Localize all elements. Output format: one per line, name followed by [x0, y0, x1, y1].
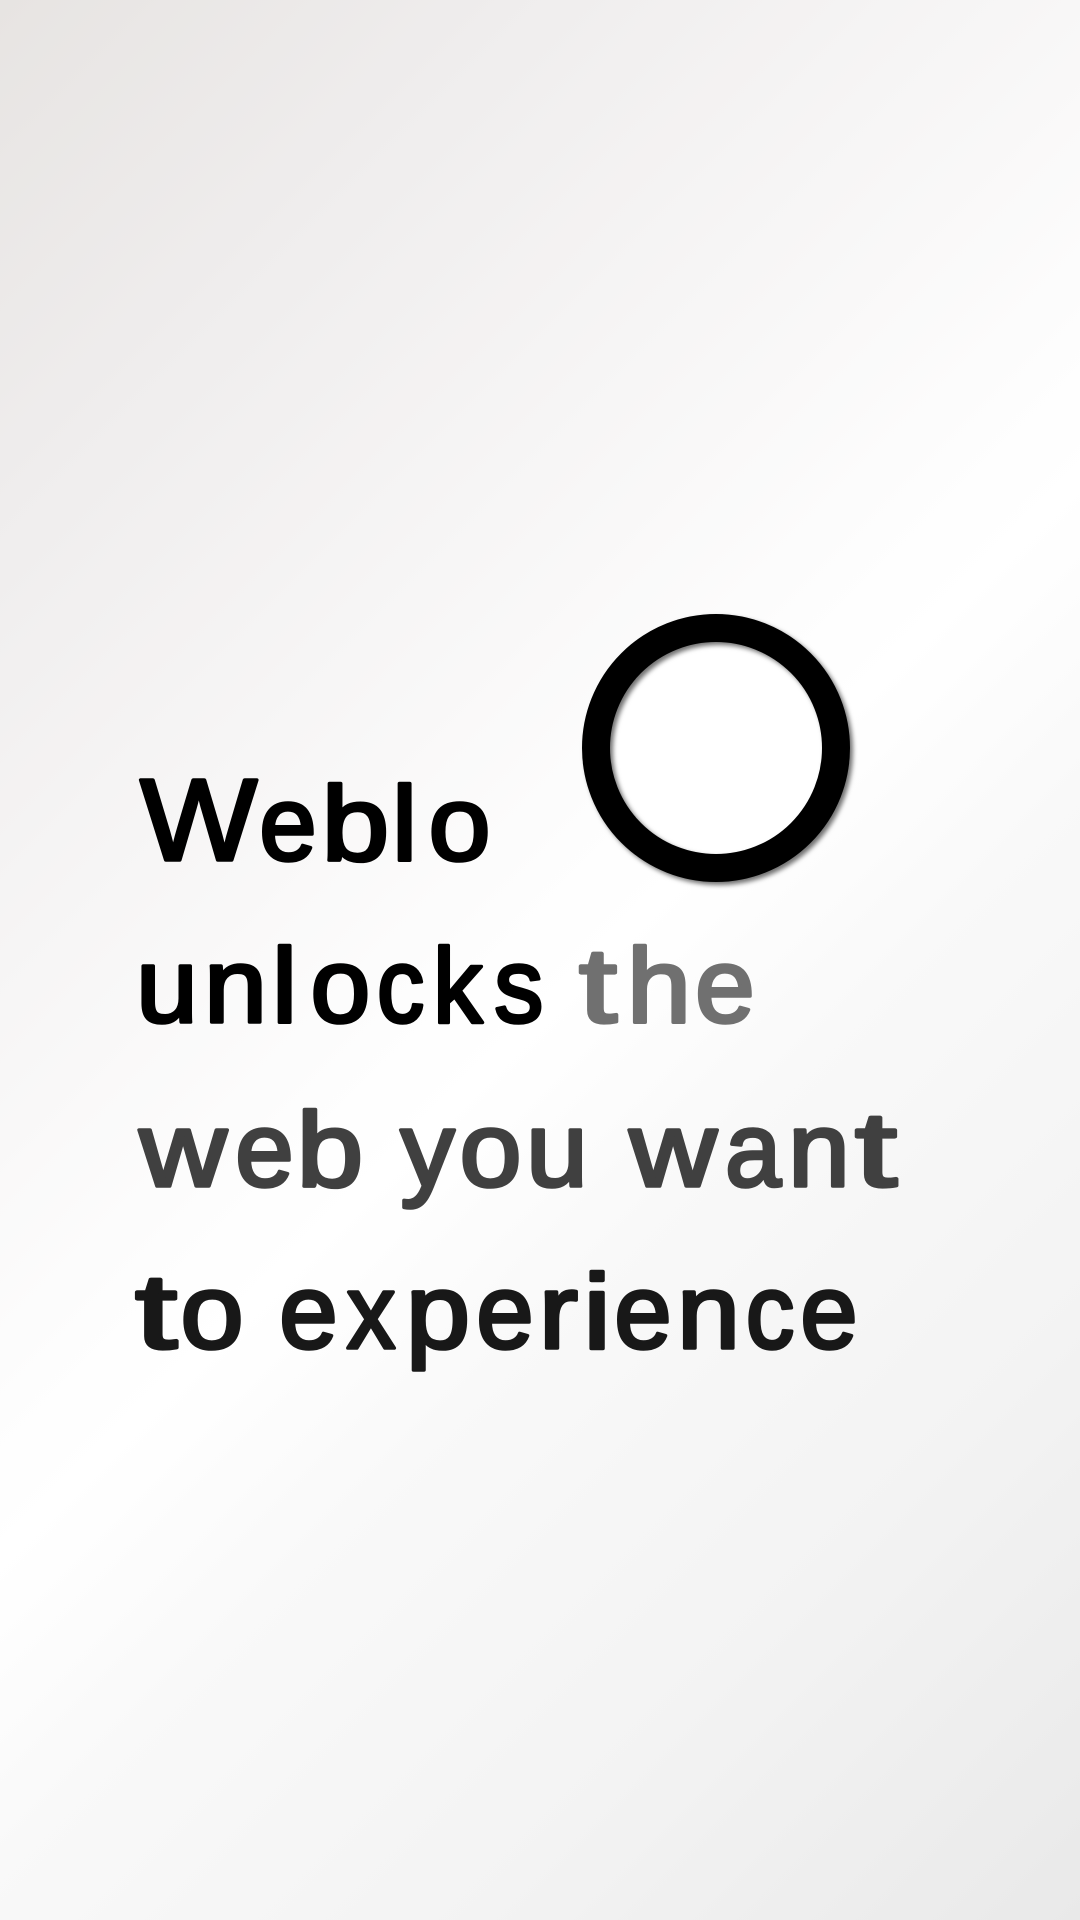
line 3: web: b	[297, 1091, 363, 1209]
line 3: you: y	[400, 1091, 455, 1209]
line 4: experience: p	[406, 1253, 470, 1371]
line 4: experience: e	[800, 1253, 858, 1371]
line 2: unlocks: u	[136, 927, 198, 1045]
line 3: want: w	[628, 1091, 717, 1209]
line 3: web: w	[138, 1091, 227, 1209]
line 4: experience: e	[614, 1253, 672, 1371]
line 4: experience: e	[476, 1253, 534, 1371]
line 4: experience: n	[677, 1253, 740, 1371]
line 2: unlocks: n	[204, 927, 267, 1045]
headline	[135, 755, 897, 1371]
line 4: to: t	[135, 1253, 177, 1371]
line 4: experience: r	[539, 1253, 578, 1371]
line 1: Weblo: W	[140, 755, 258, 885]
line 3: want: n	[788, 1091, 850, 1209]
line 4: experience: i	[583, 1253, 611, 1371]
line 1: Weblo: e	[259, 765, 317, 883]
line 4: experience: x	[347, 1253, 395, 1371]
line 2: unlocks: s	[494, 927, 543, 1045]
line 3: you: o	[460, 1091, 522, 1209]
line 2: unlocks: k	[433, 927, 483, 1045]
line 1: Weblo: o	[429, 765, 490, 883]
line 1: Weblo: b	[322, 765, 389, 883]
line 2: the: t	[579, 927, 617, 1045]
line 3: want: t	[855, 1091, 897, 1209]
line 4: to: o	[180, 1253, 244, 1371]
line 3: you: u	[526, 1091, 588, 1209]
line 3: web: e	[235, 1091, 294, 1209]
line 2: unlocks: o	[311, 927, 370, 1045]
line 2: unlocks: c	[377, 927, 424, 1045]
line 1: Weblo: l	[392, 765, 417, 883]
line 2: unlocks: l	[272, 927, 297, 1045]
line 4: experience: e	[279, 1253, 338, 1371]
line 4: experience: c	[746, 1253, 794, 1371]
icon: ring	[596, 628, 836, 868]
line 3: want: a	[725, 1091, 781, 1209]
line 2: the: e	[695, 927, 755, 1045]
line 2: the: h	[627, 927, 691, 1045]
